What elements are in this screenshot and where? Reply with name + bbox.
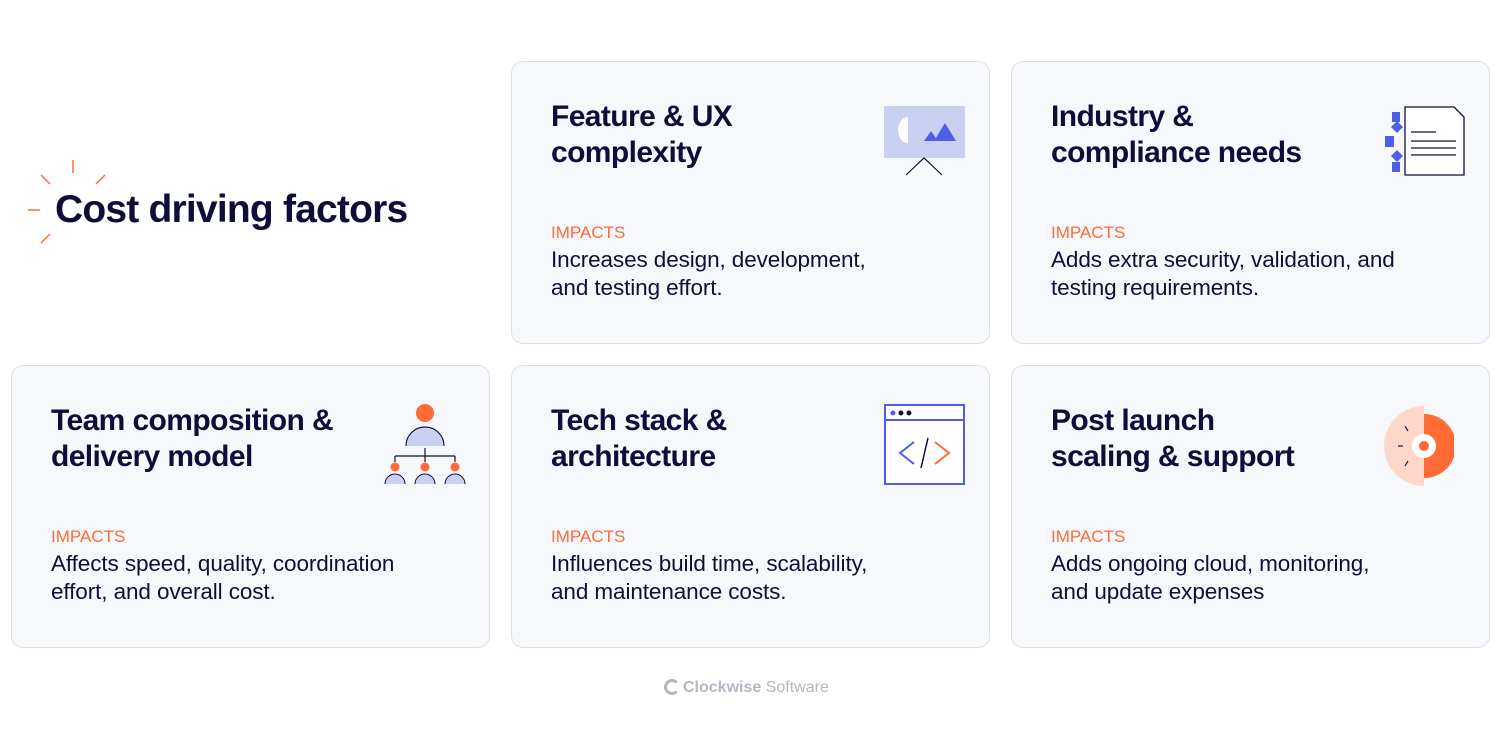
panel: post launch (1011, 365, 1490, 648)
panel: tech stack: Influences build time, scalability, (551, 551, 867, 576)
panel: team: effort, and overall cost. (51, 579, 276, 604)
panel: post launch: scaling & support (1051, 440, 1294, 473)
panel: tech stack: architecture (551, 440, 716, 473)
panel: feature & UX: complexity (551, 136, 702, 169)
panel: tech stack: Tech stack & (551, 404, 727, 437)
panel: industry: Industry & (1051, 100, 1193, 133)
panel: industry (1011, 61, 1490, 344)
panel: team: Affects speed, quality, coordination (51, 551, 394, 576)
panel: post launch: and update expenses (1051, 579, 1264, 604)
icon: code window (884, 404, 965, 485)
panel: industry: testing requirements. (1051, 275, 1259, 300)
panel: feature & UX: and testing effort. (551, 275, 723, 300)
icon: presentation (884, 106, 965, 176)
icon: document (1385, 106, 1465, 176)
icon: sunburst (28, 160, 106, 244)
panel: team: IMPACTS (51, 527, 125, 546)
panel: feature & UX: IMPACTS (551, 223, 625, 242)
icon: target (1384, 406, 1454, 486)
title: Cost driving factors (55, 188, 407, 231)
panel: team: delivery model (51, 440, 253, 473)
footer logo: Clockwise Software (683, 679, 829, 696)
icon: org chart (384, 404, 466, 484)
panel: post launch: IMPACTS (1051, 527, 1125, 546)
panel: post launch: Adds ongoing cloud, monitoring, (1051, 551, 1369, 576)
panel: industry: Adds extra security, validation, and (1051, 247, 1395, 272)
panel: feature & UX: Increases design, development, (551, 247, 866, 272)
panel: industry: IMPACTS (1051, 223, 1125, 242)
panel: tech stack (511, 365, 990, 648)
panel: team: Team composition & (51, 404, 333, 437)
panel: feature & UX (511, 61, 990, 344)
title (28, 160, 407, 244)
panel: post launch: Post launch (1051, 404, 1214, 437)
panel: tech stack: IMPACTS (551, 527, 625, 546)
panel: team (11, 365, 490, 648)
panel: feature & UX: Feature & UX (551, 100, 732, 133)
panel: tech stack: and maintenance costs. (551, 579, 786, 604)
panel: industry: compliance needs (1051, 136, 1302, 169)
